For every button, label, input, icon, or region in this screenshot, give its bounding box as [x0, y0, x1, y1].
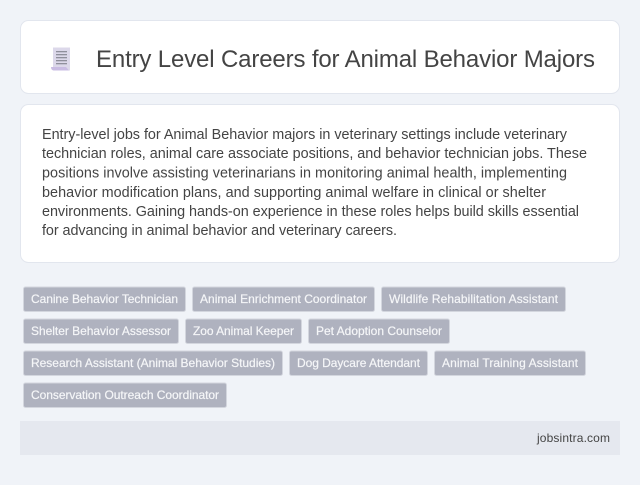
tag: Animal Enrichment Coordinator: [192, 287, 374, 312]
tag: Conservation Outreach Coordinator: Conservation Outreach Coordinator: [31, 388, 219, 402]
tag: Zoo Animal Keeper: [186, 319, 302, 344]
tag: Research Assistant: [24, 351, 282, 376]
tag: Conservation Outreach Coordinator: [24, 383, 226, 408]
tag: Wildlife Rehabilitation Assistant: Wildlife Rehabilitation Assistant: [389, 292, 559, 306]
tag: Canine Behavior Technician: [24, 287, 186, 312]
tag: Research Assistant: Research Assistant (Animal Behavior Studies): [31, 356, 275, 370]
text block: description: for advancing in animal behavior and veterinary careers.: [42, 223, 397, 239]
tag: Shelter Behavior Assessor: Shelter Behavior Assessor: [31, 324, 171, 338]
tag: Shelter Behavior Assessor: [24, 319, 178, 344]
tag: Zoo Animal Keeper: Zoo Animal Keeper: [193, 324, 294, 338]
tag: Animal Enrichment Coordinator: Animal Enrichment Coordinator: [200, 292, 367, 306]
tag: Pet Adoption Counselor: Pet Adoption Counselor: [316, 324, 442, 338]
panel: description: [20, 104, 620, 262]
title: Entry Level Careers for Animal Behavior Majors: [96, 46, 595, 73]
text block: description: environments. Gaining hands-on experience in these roles helps build skills essential: [42, 204, 579, 220]
tag list: [24, 287, 586, 408]
tag: Canine Behavior Technician: Canine Behavior Technician: [31, 292, 178, 306]
footer bar: [20, 421, 620, 455]
text block: description: technician roles, animal care associate positions, and behavior technician jobs. These: [42, 146, 587, 162]
tag: Dog Daycare Attendant: Dog Daycare Attendant: [297, 356, 421, 370]
tag: Pet Adoption Counselor: [308, 319, 450, 344]
text block: description: [42, 127, 587, 239]
tag: Animal Training Assistant: [434, 351, 586, 376]
text block: description: Entry-level jobs for Animal Behavior majors in veterinary settings include veterinary: [42, 127, 568, 143]
footer source text: jobsintra.com: [536, 431, 610, 445]
tag: Dog Daycare Attendant: [290, 351, 428, 376]
tag: Animal Training Assistant: Animal Training Assistant: [442, 356, 579, 370]
text block: description: positions involve assisting veterinarians in monitoring animal health, implementing: [42, 166, 567, 182]
icon: document scroll: [51, 48, 70, 70]
tag: Wildlife Rehabilitation Assistant: [382, 287, 566, 312]
panel: header: [20, 20, 620, 94]
text block: description: behavior modification plans, and supporting animal welfare in clinical or shelter: [42, 185, 546, 201]
